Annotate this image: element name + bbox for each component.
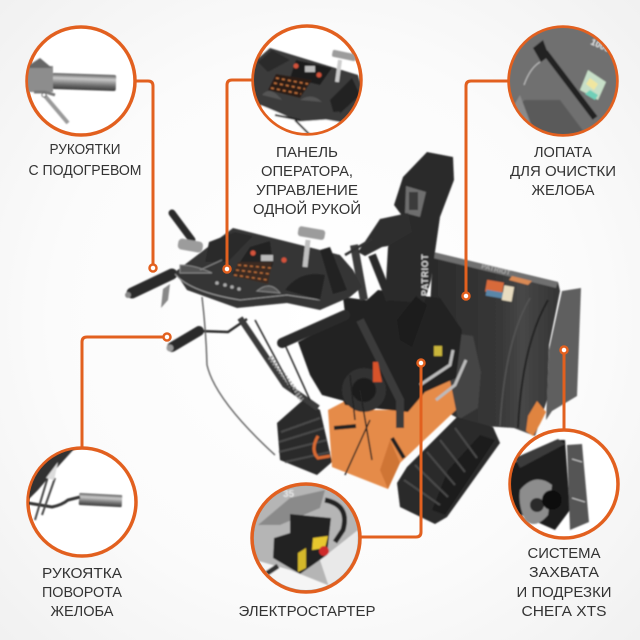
- discharge chute: [345, 152, 454, 303]
- heading: operator panel: ПАНЕЛЬ: [276, 144, 338, 161]
- line: chute: [82, 337, 163, 448]
- left track: [277, 400, 332, 475]
- heading: chute rotation handle: РУКОЯТКА: [42, 565, 122, 582]
- callout: heated handles: [25, 27, 135, 135]
- callout: chute rotation handle: [28, 448, 136, 556]
- heading: operator panel: УПРАВЛЕНИЕ: [256, 182, 358, 199]
- heading: electric starter: ЭЛЕКТРОСТАРТЕР: [238, 603, 376, 620]
- heading: chute rotation handle: ПОВОРОТА: [42, 584, 122, 601]
- line: handles: [135, 81, 153, 265]
- heading: chute rotation handle: [42, 565, 122, 620]
- heading: chute rotation handle: ЖЕЛОБА: [50, 603, 114, 620]
- heading: XTS system: СНЕГА XTS: [522, 603, 606, 620]
- auger housing: [425, 252, 560, 436]
- heading: chute cleaning shovel: ДЛЯ ОЧИСТКИ: [510, 163, 616, 180]
- lower frame arms: [202, 297, 345, 455]
- marker dots: [150, 264, 568, 366]
- housing label stickers: [485, 280, 514, 302]
- callout: operator panel: [245, 26, 365, 140]
- heading: heated handles: [28, 141, 142, 179]
- line: starter: [358, 367, 421, 537]
- heading: operator panel: [253, 144, 361, 218]
- icon: heated grip: [25, 58, 116, 123]
- heading: XTS system: И ПОДРЕЗКИ: [516, 584, 612, 601]
- line: panel: [227, 80, 253, 265]
- heading: chute cleaning shovel: [510, 144, 616, 199]
- icon: crank handle: [28, 448, 122, 520]
- icon: starter closeup: 35: [283, 489, 295, 500]
- orange body: [314, 380, 456, 489]
- callout: chute cleaning shovel: [505, 25, 625, 140]
- chute deflector label: [397, 296, 427, 347]
- heading: operator panel: ОПЕРАТОРА,: [261, 163, 353, 180]
- heading: chute cleaning shovel: ЖЕЛОБА: [532, 182, 594, 199]
- right track: [397, 417, 500, 524]
- heading: chute cleaning shovel: ЛОПАТА: [534, 144, 592, 161]
- housing brand text: PATRIOT: [481, 263, 512, 277]
- heading: XTS system: ЗАХВАТА: [529, 564, 599, 581]
- scraper plate: [546, 288, 581, 420]
- heading: heated handles: С ПОДОГРЕВОМ: [28, 162, 142, 179]
- callout: XTS system: [510, 430, 618, 538]
- icon: XTS auger closeup: [510, 439, 589, 530]
- gear cover: [450, 333, 481, 420]
- heading: heated handles: РУКОЯТКИ: [50, 141, 120, 158]
- chute brand text: PATRIOT: [420, 254, 430, 296]
- line: xts: [562, 354, 566, 430]
- line: shovel: [466, 81, 509, 292]
- orange skid shoe: [526, 401, 546, 436]
- icon: panel closeup: [254, 47, 360, 133]
- connector lines: [82, 80, 564, 537]
- snowblower machine: [125, 152, 581, 524]
- icon: shovel closeup: 1000: [589, 37, 612, 54]
- operator console: [125, 213, 362, 310]
- chute crank handle: [166, 319, 247, 352]
- heading: XTS system: СИСТЕМА: [528, 545, 600, 562]
- callout: electric starter: [250, 484, 365, 600]
- heading: operator panel: ОДНОЙ РУКОЙ: [253, 200, 361, 218]
- engine and frame: [298, 245, 466, 475]
- heading: XTS system: [516, 545, 612, 620]
